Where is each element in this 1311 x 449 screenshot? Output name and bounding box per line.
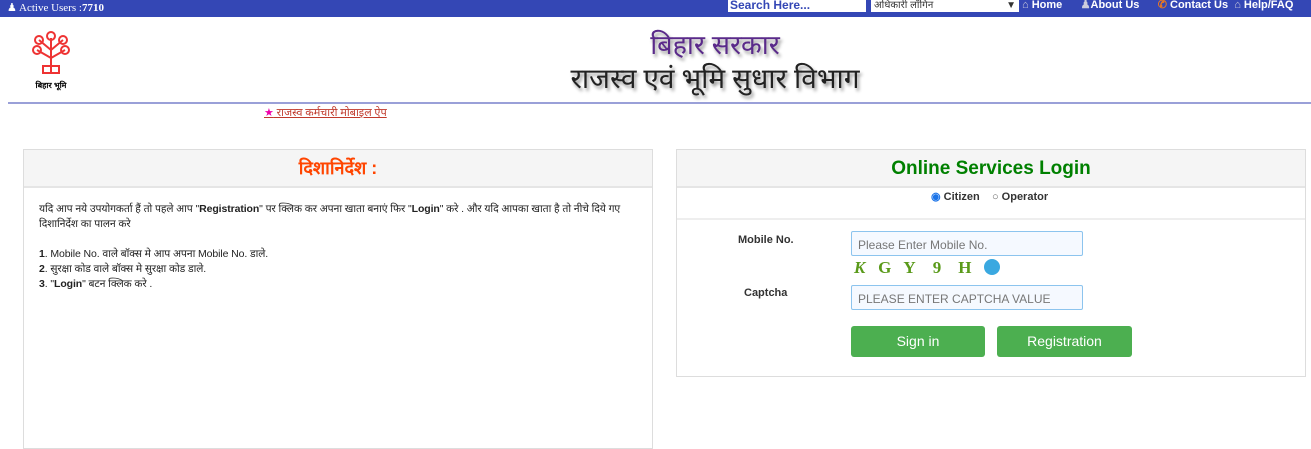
captcha input: PLEASE ENTER CAPTCHA VALUE (858, 292, 1051, 306)
captcha label: Captcha (744, 287, 787, 299)
active users: ♟ Active Users :7710 (7, 2, 104, 14)
guidelines heading: दिशानिर्देश : (299, 158, 377, 178)
guidelines text: यदि आप नये उपयोगकर्ता हैं तो पहले आप "Registration" पर क्लिक कर अपना खाता बनाएं फिर "Login" करे . और यदि आपका खाता है तो नीचे दिये गए दिशानिर्देश का पालन करे (39, 203, 620, 230)
guidelines text: 2. सुरक्षा कोड वाले बॉक्स मे सुरक्षा कोड डाले. (39, 263, 206, 275)
mobile input (851, 231, 1083, 256)
login select: अधिकारी लॉगिन (874, 0, 933, 11)
captcha image: K G Y 9 H (854, 258, 971, 277)
radio options: ◉ Citizen ○ Operator (931, 191, 1048, 203)
title (570, 30, 864, 100)
login heading (677, 150, 1305, 188)
search box (728, 0, 866, 12)
logo: बिहार भूमि (36, 81, 66, 90)
guidelines heading (24, 150, 652, 188)
mobile label: Mobile No. (738, 234, 794, 246)
captcha input (851, 285, 1083, 310)
guidelines text (39, 202, 620, 290)
guidelines text: 1. Mobile No. वाले बॉक्स मे आप अपना Mobile No. डाले. (39, 248, 268, 260)
login select (871, 0, 1019, 12)
sign in button (851, 326, 985, 357)
top bar (0, 0, 1311, 17)
registration button (997, 326, 1132, 357)
title: राजस्व एवं भूमि सुधार विभाग (570, 64, 860, 95)
mobile input: Please Enter Mobile No. (858, 238, 987, 252)
registration button: Registration (1027, 333, 1102, 349)
login heading: Online Services Login (891, 158, 1091, 179)
login select: ▼ (1006, 0, 1016, 11)
title: बिहार सरकार (650, 30, 780, 60)
logo (32, 31, 70, 90)
panel: login (676, 149, 1306, 377)
mobile app link: ★ राजस्व कर्मचारी मोबाइल ऐप (264, 107, 387, 119)
guidelines text: 3. "Login" बटन क्लिक करे . (39, 278, 152, 290)
panel: guidelines (23, 149, 653, 449)
sign in button: Sign in (897, 333, 939, 349)
